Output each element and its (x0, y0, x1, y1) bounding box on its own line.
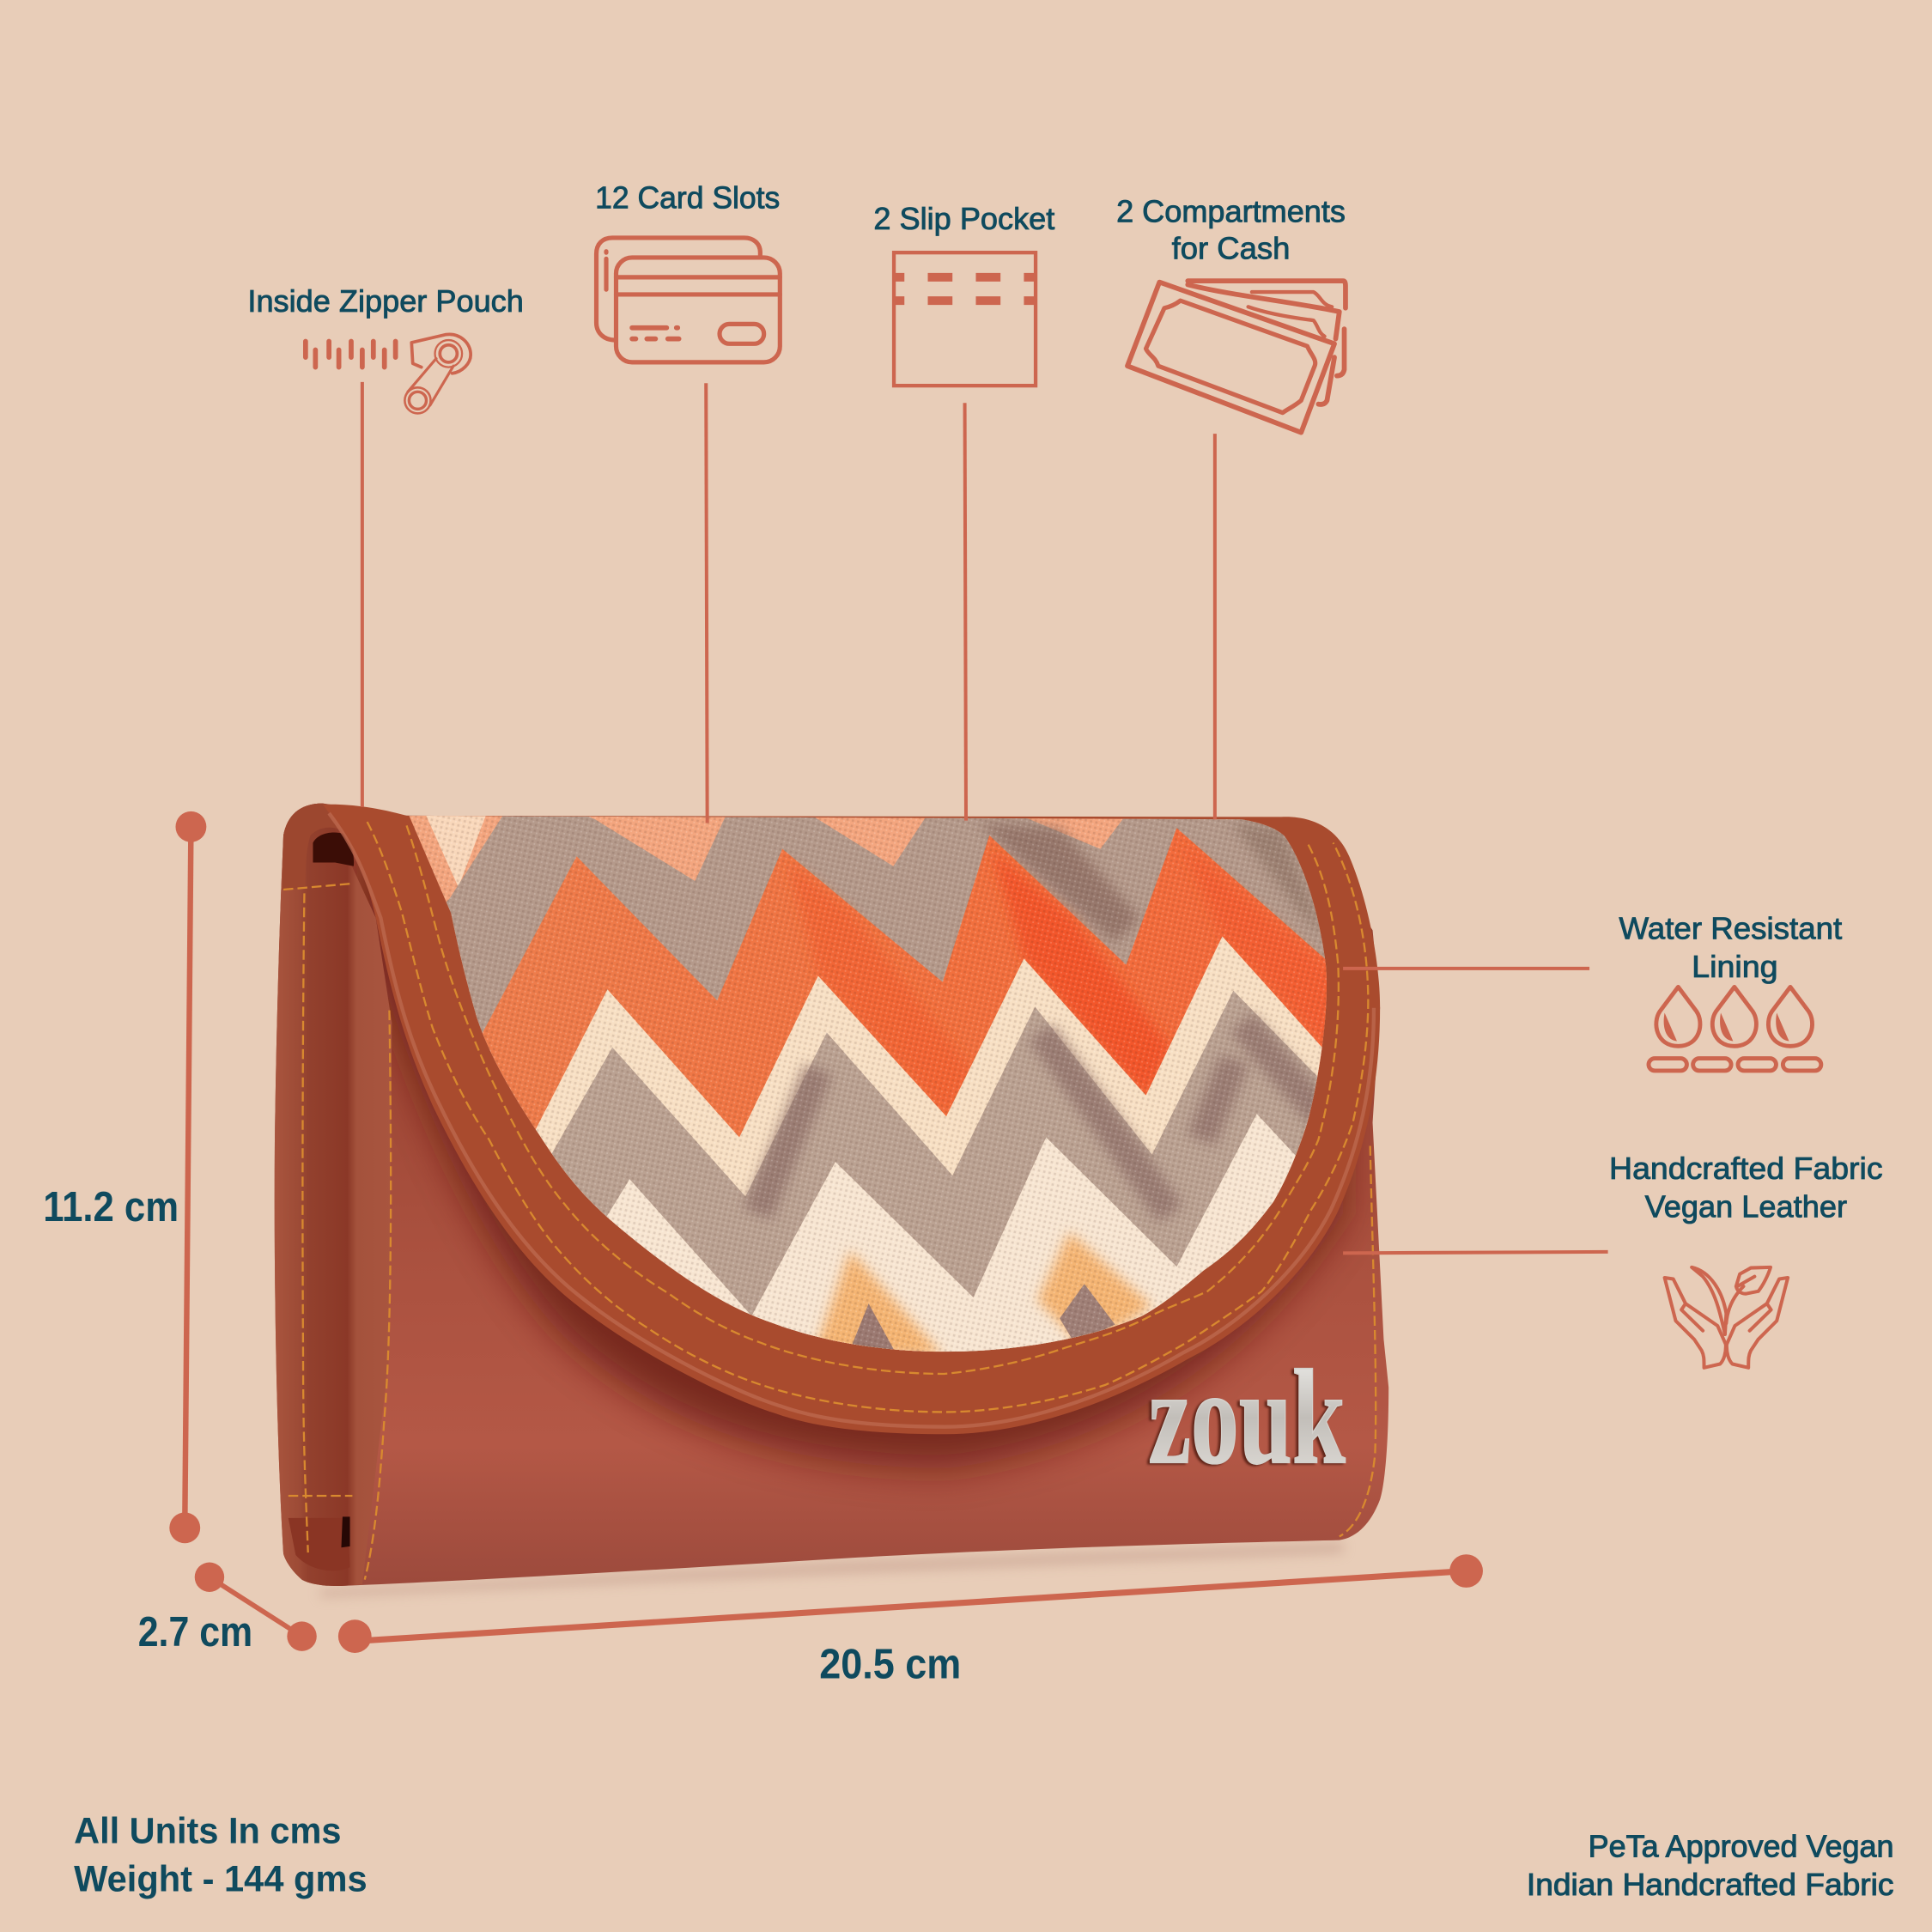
dimension: height 11.2 cm: 11.2 cm (43, 1184, 179, 1230)
taupe upper band (447, 816, 1327, 1163)
taupe main band (551, 991, 1317, 1352)
gusset top rim (283, 804, 360, 890)
label: 2 Compartments for Cash: 2 Compartments (1116, 194, 1346, 228)
note: units and weight: Weight - 144 gms (74, 1859, 368, 1900)
flap stitching (368, 822, 1368, 1412)
red-orange highlights (795, 857, 1327, 1106)
callout line: water resistant lining (1343, 967, 1589, 969)
icon: slip pocket (893, 252, 1036, 386)
peach top triangles (409, 816, 1327, 1152)
dimension: depth 2.7 cm: 2.7 cm (138, 1609, 252, 1656)
taupe dark accents (980, 823, 1139, 943)
icon: cards (597, 238, 780, 362)
flap cast shadow (369, 862, 1343, 1468)
ground shadow (320, 1543, 1343, 1597)
flap leather (323, 805, 1380, 1434)
label: 2 Compartments for Cash: for Cash (1172, 231, 1290, 265)
icon: hands holding plant (1665, 1267, 1788, 1368)
callout line: zipper pouch (361, 382, 363, 807)
flap piping (329, 813, 1374, 1427)
note: units and weight (74, 1811, 368, 1900)
note: certifications: Indian Handcrafted Fabric (1527, 1868, 1894, 1902)
label: Handcrafted Fabric Vegan Leather: Vegan Leather (1645, 1190, 1847, 1224)
icon: water drops on lining (1649, 987, 1821, 1071)
label: Water Resistant Lining (1619, 911, 1842, 984)
label: Inside Zipper Pouch: Inside Zipper Pouch (247, 284, 524, 319)
dimension: width 20.5 cm (338, 1554, 1483, 1687)
label: Water Resistant Lining: Water Resistant (1619, 911, 1842, 945)
label: Handcrafted Fabric Vegan Leather (1609, 1151, 1883, 1224)
orange band (483, 828, 1327, 1155)
side gusset (275, 804, 392, 1586)
dark mauve stripes (757, 1023, 1321, 1213)
zouk metal logo: zouk (1148, 1342, 1346, 1492)
label: 2 Slip Pocket: 2 Slip Pocket (873, 202, 1054, 236)
callout line: handcrafted fabric (1343, 1252, 1608, 1253)
dimension: depth 2.7 cm (138, 1563, 317, 1656)
label: 2 Compartments for Cash (1116, 194, 1346, 265)
wallet body (275, 804, 1388, 1586)
callout line: compartments (1213, 434, 1216, 819)
cream band (536, 936, 1322, 1352)
label: Handcrafted Fabric Vegan Leather: Handcrafted Fabric (1609, 1151, 1883, 1186)
orange-yellow accents (813, 1232, 1152, 1355)
note: certifications (1527, 1829, 1894, 1902)
bottom mauve tips (852, 1303, 894, 1350)
note: units and weight: All Units In cms (74, 1811, 341, 1852)
icon: zipper (306, 334, 471, 413)
lower cream band (606, 1114, 1296, 1352)
callout line: card slots (706, 383, 708, 823)
fabric panel (409, 816, 1327, 1352)
product photo: wallet (275, 788, 1388, 1597)
gusset top opening (313, 833, 354, 866)
icon: banknotes (1127, 281, 1346, 433)
label: Water Resistant Lining: Lining (1692, 950, 1778, 984)
weave texture (409, 816, 1327, 1352)
callout line: slip pocket (965, 403, 966, 821)
dimension: height 11.2 cm (43, 811, 206, 1543)
note: certifications: PeTa Approved Vegan (1589, 1829, 1894, 1863)
gusset stitches (283, 884, 1376, 1580)
gusset bottom opening (289, 1518, 350, 1571)
label: 12 Card Slots: 12 Card Slots (595, 181, 780, 216)
dimension: width 20.5 cm: 20.5 cm (819, 1641, 961, 1687)
